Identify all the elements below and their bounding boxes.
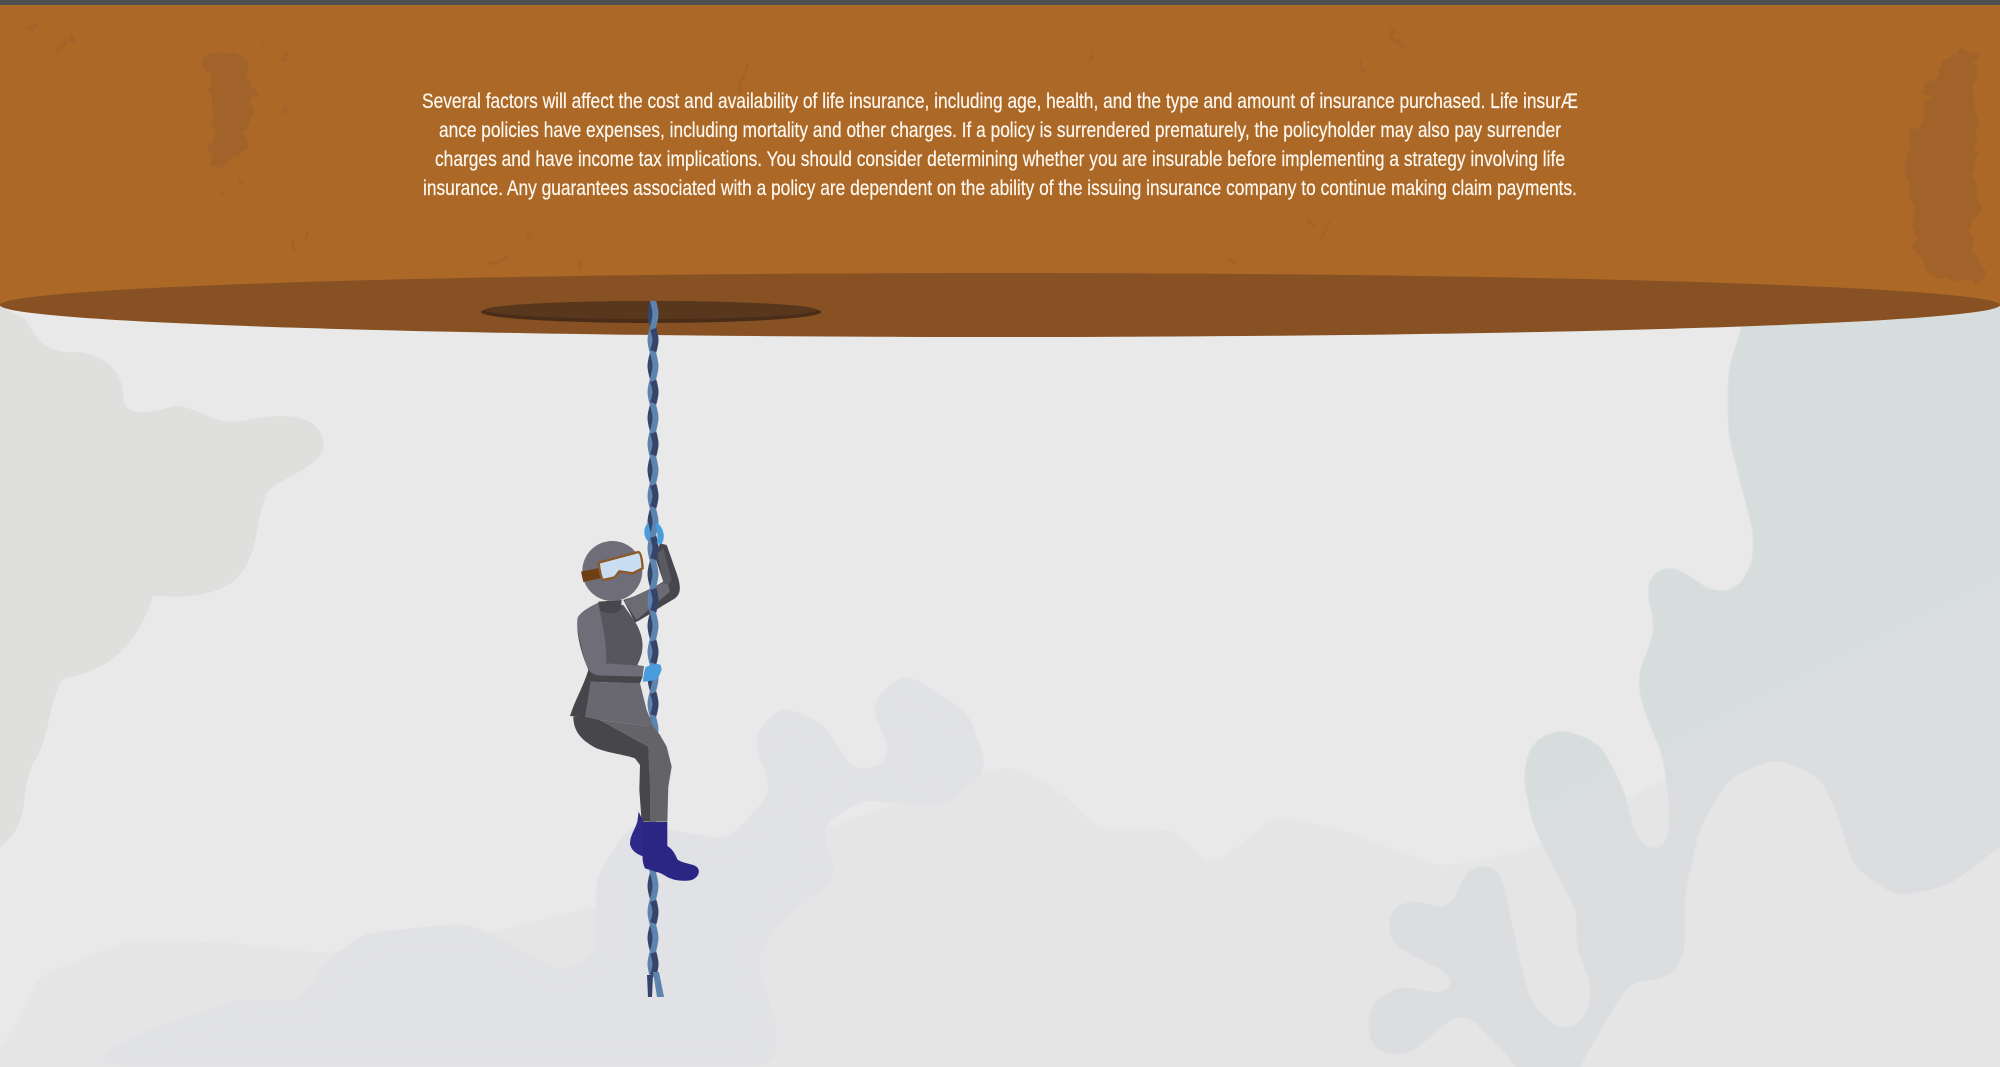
disclosure text block: ance policies have expenses, including mortality and other charges. If a policy is surrendered prematurely, the policyholder may also pay surrender [439,119,1561,142]
front boot [643,822,699,881]
stain: left [205,50,255,167]
rope [647,301,664,997]
boots [630,812,699,881]
background cloud shapes [0,300,2000,1067]
goggle strap [581,568,601,582]
rust stains [28,15,1986,285]
cloud: right [1367,300,2000,1067]
neck [598,600,622,613]
disclosure text block: charges and have income tax implications. You should consider determining whether you are insurable before implementing a strategy involving life [435,148,1565,171]
lower hand glove [643,664,662,682]
cloud: faint rear band [0,560,2000,1067]
cloud: centre [75,672,988,1066]
top hand glove [644,523,664,544]
disclosure text block: Several factors will affect the cost and availability of life insurance, including age, health, and the type and amount of insurance purchased. Life insurÆ [422,90,1578,113]
thigh and shin [600,720,672,822]
brown ceiling slab [0,4,2000,306]
cloud: left [0,306,324,847]
hip [585,682,653,727]
goggle lens [599,552,643,580]
torso [591,603,644,683]
top bar [0,0,2000,5]
thigh shadow [573,717,651,822]
disclosure text block: insurance. Any guarantees associated with a policy are dependent on the ability of the issuing insurance company to continue making claim payments. [423,177,1577,200]
disclosure text block [422,90,1578,200]
underside ellipse of the slab [0,273,2000,337]
upper body [570,523,672,822]
head [582,541,642,601]
climber back arm [623,543,680,623]
stain specks [28,15,1402,272]
climber figure [570,523,699,881]
hole in the ceiling [481,301,821,323]
stain: right [1905,51,1986,285]
near arm [577,603,644,677]
back boot [630,812,644,857]
torso side shadow [570,615,643,717]
